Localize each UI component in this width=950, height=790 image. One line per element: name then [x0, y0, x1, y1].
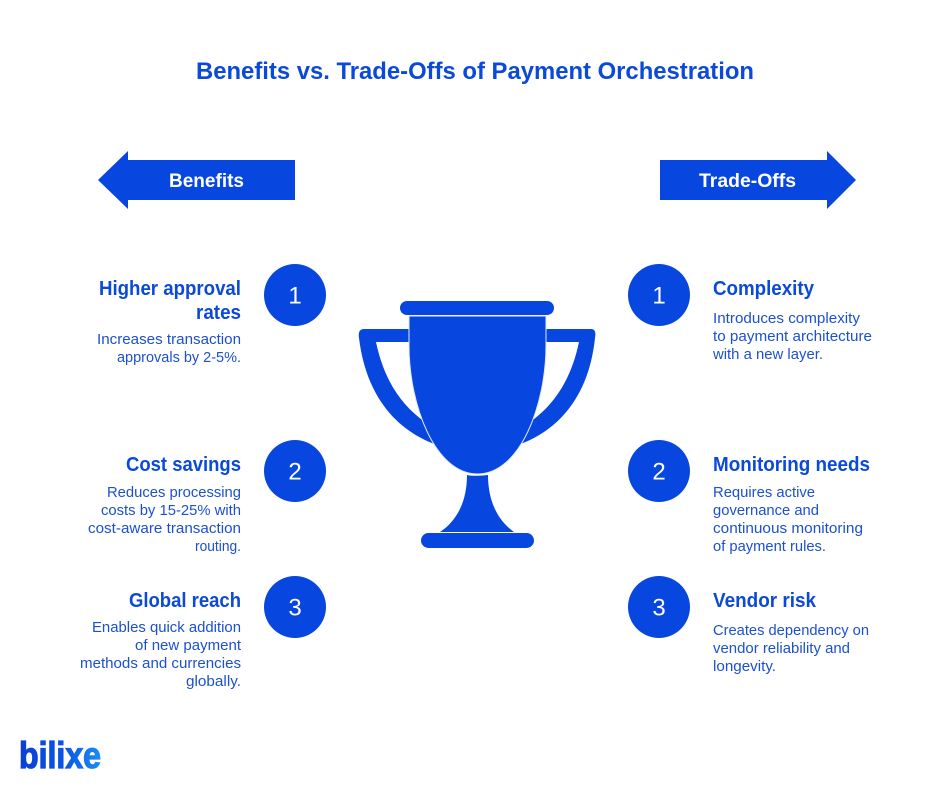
benefit 3: global reach	[80, 576, 326, 690]
heading: Higher approval	[99, 278, 241, 300]
heading: Cost savings	[126, 454, 241, 476]
benefit 1: higher approval rates	[97, 264, 326, 366]
number badge 1	[628, 264, 690, 326]
arrow: Trade-Offs: Trade-Offs	[699, 170, 796, 192]
trade-off 3: vendor risk	[628, 576, 869, 675]
description: Enables quick addition	[92, 620, 241, 636]
trophy base	[421, 533, 534, 548]
heading: Global reach	[129, 590, 241, 612]
description: Creates dependency on	[713, 623, 869, 639]
number badge 2: 2	[652, 458, 666, 486]
number badge 2: 2	[288, 458, 302, 486]
description	[97, 332, 241, 366]
benefit 2: cost savings	[88, 440, 326, 555]
trophy stem	[440, 475, 514, 532]
heading	[99, 278, 241, 324]
heading: Complexity	[713, 278, 815, 300]
trade-off 2: monitoring needs	[628, 440, 870, 555]
number badge 3	[628, 576, 690, 638]
trophy rim	[400, 301, 554, 315]
arrow: Benefits: Benefits	[169, 170, 244, 192]
heading: Monitoring needs	[713, 454, 870, 476]
arrow: Benefits	[98, 151, 295, 209]
description: to payment architecture	[713, 329, 872, 345]
number badge 3: 3	[288, 594, 302, 622]
description	[80, 620, 241, 690]
description: Requires active	[713, 485, 815, 501]
description: of payment rules.	[713, 539, 826, 555]
description: methods and currencies	[80, 656, 241, 672]
heading: Vendor risk	[713, 590, 817, 612]
description	[713, 485, 863, 555]
title: Benefits vs. Trade-Offs of Payment Orchestration	[196, 58, 754, 85]
number badge 1: 1	[288, 282, 302, 310]
description: of new payment	[135, 638, 241, 654]
icon: trophy	[359, 301, 595, 548]
description: continuous monitoring	[713, 521, 863, 537]
logo: bilixe: bilixe	[19, 735, 101, 776]
number badge 3	[264, 576, 326, 638]
description: costs by 15-25% with	[101, 503, 241, 519]
description: Increases transaction	[97, 332, 241, 348]
heading: rates	[196, 302, 241, 324]
description: approvals by 2-5%.	[117, 350, 241, 366]
description: globally.	[186, 674, 241, 690]
description	[712, 311, 872, 363]
description	[88, 485, 241, 555]
number badge 2	[264, 440, 326, 502]
trophy handles	[359, 329, 595, 445]
description: longevity.	[713, 659, 776, 675]
description: governance and	[713, 503, 819, 519]
number badge 1	[264, 264, 326, 326]
description: with a new layer.	[712, 347, 823, 363]
number badge 2	[628, 440, 690, 502]
number badge 3: 3	[652, 594, 666, 622]
number badge 1: 1	[652, 282, 666, 310]
description: vendor reliability and	[713, 641, 850, 657]
description	[713, 623, 869, 675]
trophy cup	[409, 316, 546, 474]
description: Reduces processing	[107, 485, 241, 501]
trade-off 1: complexity	[628, 264, 872, 363]
description: cost-aware transaction	[88, 521, 241, 537]
description: Introduces complexity	[713, 311, 861, 327]
arrow: Trade-Offs	[660, 151, 856, 209]
description: routing.	[195, 539, 241, 555]
